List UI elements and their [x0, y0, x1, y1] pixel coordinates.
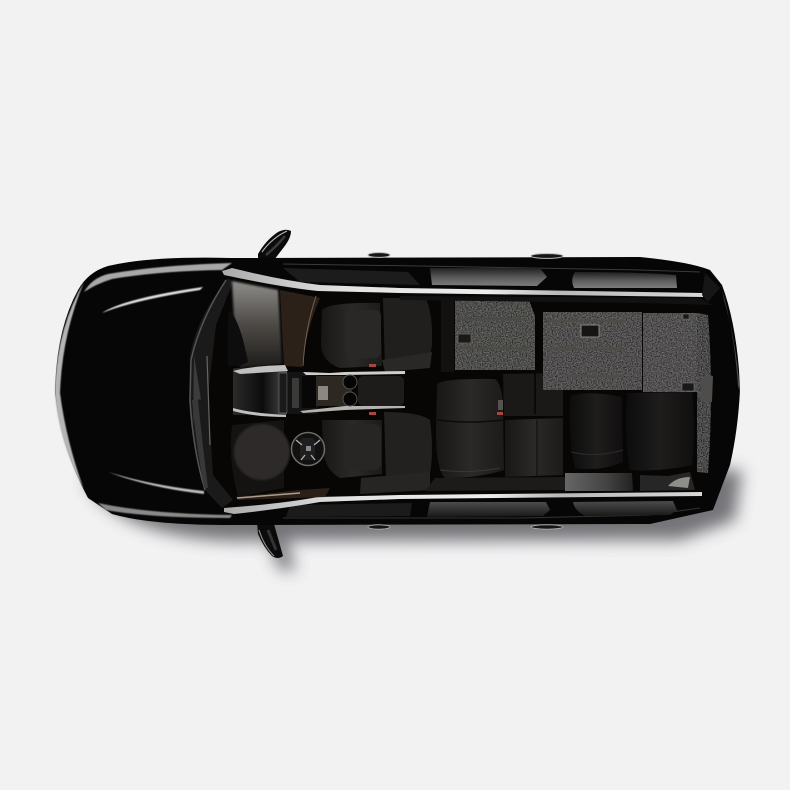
cargo side trim [697, 313, 711, 473]
side window: bottom rear [573, 501, 677, 516]
folded seat panel: third row [543, 312, 642, 390]
centre stack [233, 365, 318, 417]
rear footwell panel [640, 472, 695, 491]
door handle: bottom rear [531, 525, 563, 529]
driver dash hump [234, 424, 290, 480]
lower dash panel [231, 420, 284, 497]
rear corner pillars [702, 273, 720, 302]
side trim line: bottom [283, 508, 700, 518]
side window: top rear [572, 272, 677, 288]
cargo carpet [643, 313, 697, 392]
highlight: lower edge [98, 503, 232, 518]
mirror: bottom [257, 522, 283, 558]
wood trim area [280, 290, 320, 367]
side window: top middle [430, 268, 547, 286]
passenger footwell glare [232, 281, 282, 368]
third row floor panel [565, 473, 633, 491]
lower footwell floor [236, 488, 330, 500]
cup holders [343, 375, 357, 389]
hood [55, 263, 232, 518]
floor strip [425, 477, 565, 491]
cabin interior [227, 281, 713, 500]
upper sill trim [400, 296, 712, 305]
roof rail: bottom [224, 492, 702, 514]
side window: bottom middle [427, 502, 550, 517]
front seat: driver [322, 412, 432, 494]
side window: top front [283, 268, 420, 285]
tail edge highlight [722, 290, 740, 392]
third row seats [570, 392, 694, 470]
highlight: hood crease bottom [108, 472, 204, 494]
folded seat panel: second row [441, 300, 535, 372]
car body [55, 257, 740, 525]
highlight: hood crease top [102, 287, 203, 313]
steering wheel [292, 432, 324, 466]
mirror: top [258, 230, 291, 262]
highlight: nose [55, 282, 84, 490]
door handle: top rear [531, 254, 563, 258]
car [55, 230, 740, 558]
windshield cowl and wiper [189, 278, 233, 508]
door handle: top front [368, 253, 390, 257]
tailgate latch [700, 376, 713, 402]
highlight: hood upper edge [84, 263, 232, 292]
car shadow [85, 470, 742, 570]
door handle: bottom front [368, 525, 390, 529]
glass and cabin base [194, 276, 713, 508]
side trim line: top [283, 264, 700, 272]
dark pillar shape [227, 310, 248, 366]
second row seats [436, 373, 563, 478]
side window: bottom front [286, 503, 412, 517]
centre console [300, 371, 405, 413]
roof rail: top [222, 268, 703, 297]
highlight: rear sill [668, 477, 690, 488]
front seat: passenger [321, 298, 432, 372]
